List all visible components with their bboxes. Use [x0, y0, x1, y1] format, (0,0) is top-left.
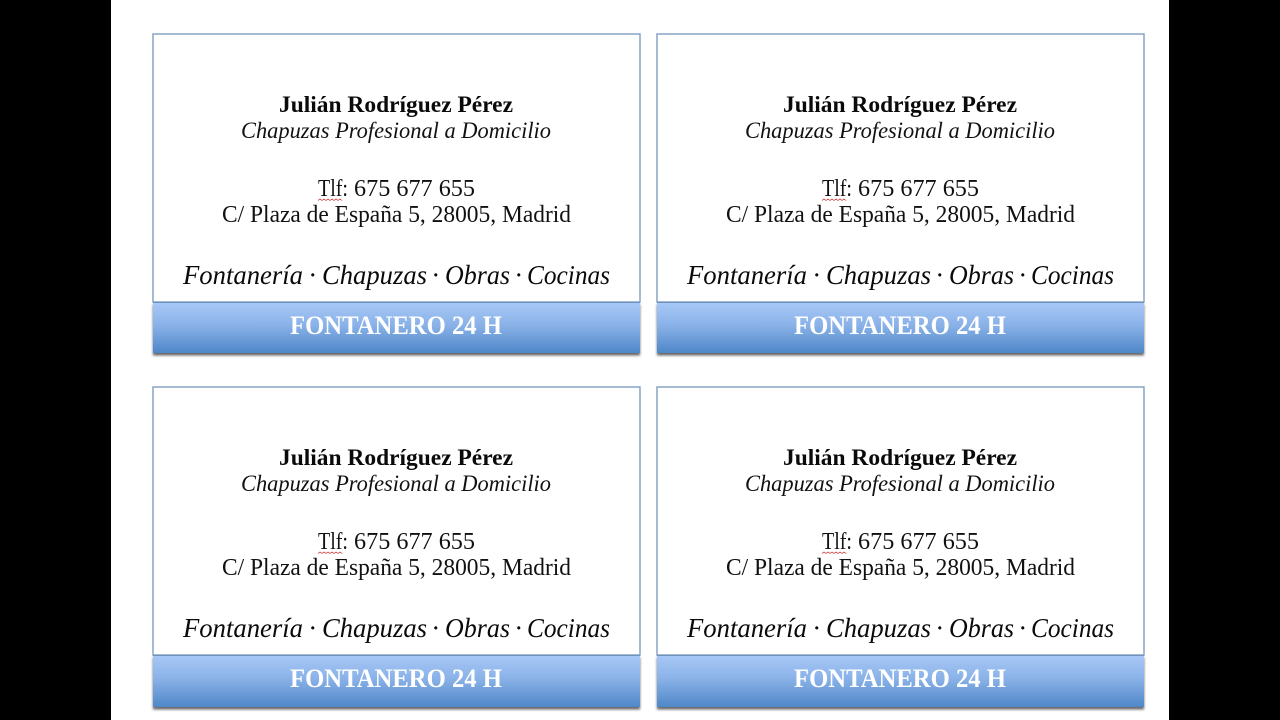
services: ·	[813, 613, 820, 643]
services: Fontanería	[182, 613, 303, 643]
business card: top right	[657, 34, 1144, 353]
banner	[657, 302, 1144, 353]
phone: Tlf:	[318, 176, 348, 202]
profession: Chapuzas Profesional a Domicilio	[745, 471, 1055, 496]
services: ·	[1019, 613, 1026, 643]
profession: Chapuzas Profesional a Domicilio	[745, 118, 1055, 143]
phone: Tlf:	[822, 529, 852, 555]
name: Julián Rodríguez Pérez	[279, 445, 513, 470]
phone: 675 677 655	[354, 529, 475, 555]
name: Julián Rodríguez Pérez	[279, 92, 513, 117]
services: ·	[936, 260, 943, 290]
services: Chapuzas	[826, 613, 931, 643]
banner	[657, 655, 1144, 707]
services: ·	[515, 260, 522, 290]
business card: top left	[153, 34, 640, 353]
address: C/ Plaza de España 5, 28005, Madrid	[222, 202, 571, 228]
services: ·	[432, 613, 439, 643]
banner: FONTANERO 24 H	[290, 311, 502, 340]
phone: 675 677 655	[354, 176, 475, 202]
services: ·	[309, 613, 316, 643]
services: ·	[515, 613, 522, 643]
services: ·	[1019, 260, 1026, 290]
services: Chapuzas	[322, 613, 427, 643]
services: Cocinas	[1031, 260, 1114, 290]
business card: bottom left	[153, 387, 640, 707]
services: Chapuzas	[322, 260, 427, 290]
services: Cocinas	[1031, 613, 1114, 643]
address: C/ Plaza de España 5, 28005, Madrid	[726, 555, 1075, 581]
address: C/ Plaza de España 5, 28005, Madrid	[726, 202, 1075, 228]
banner	[153, 302, 640, 353]
phone: Tlf:	[318, 529, 348, 555]
services: Obras	[445, 260, 510, 290]
services: Obras	[445, 613, 510, 643]
banner: FONTANERO 24 H	[290, 664, 502, 693]
services: ·	[432, 260, 439, 290]
services: ·	[936, 613, 943, 643]
services: ·	[813, 260, 820, 290]
services: Obras	[949, 613, 1014, 643]
business card: bottom right	[657, 387, 1144, 707]
phone: 675 677 655	[858, 176, 979, 202]
phone: Tlf:	[822, 176, 852, 202]
banner: FONTANERO 24 H	[794, 664, 1006, 693]
profession: Chapuzas Profesional a Domicilio	[241, 118, 551, 143]
banner: FONTANERO 24 H	[794, 311, 1006, 340]
services: Cocinas	[527, 260, 610, 290]
services: Fontanería	[686, 613, 807, 643]
services: Fontanería	[182, 260, 303, 290]
name: Julián Rodríguez Pérez	[783, 92, 1017, 117]
services: Fontanería	[686, 260, 807, 290]
services: Obras	[949, 260, 1014, 290]
services: Chapuzas	[826, 260, 931, 290]
services: Cocinas	[527, 613, 610, 643]
profession: Chapuzas Profesional a Domicilio	[241, 471, 551, 496]
banner	[153, 655, 640, 707]
address: C/ Plaza de España 5, 28005, Madrid	[222, 555, 571, 581]
phone: 675 677 655	[858, 529, 979, 555]
services: ·	[309, 260, 316, 290]
name: Julián Rodríguez Pérez	[783, 445, 1017, 470]
